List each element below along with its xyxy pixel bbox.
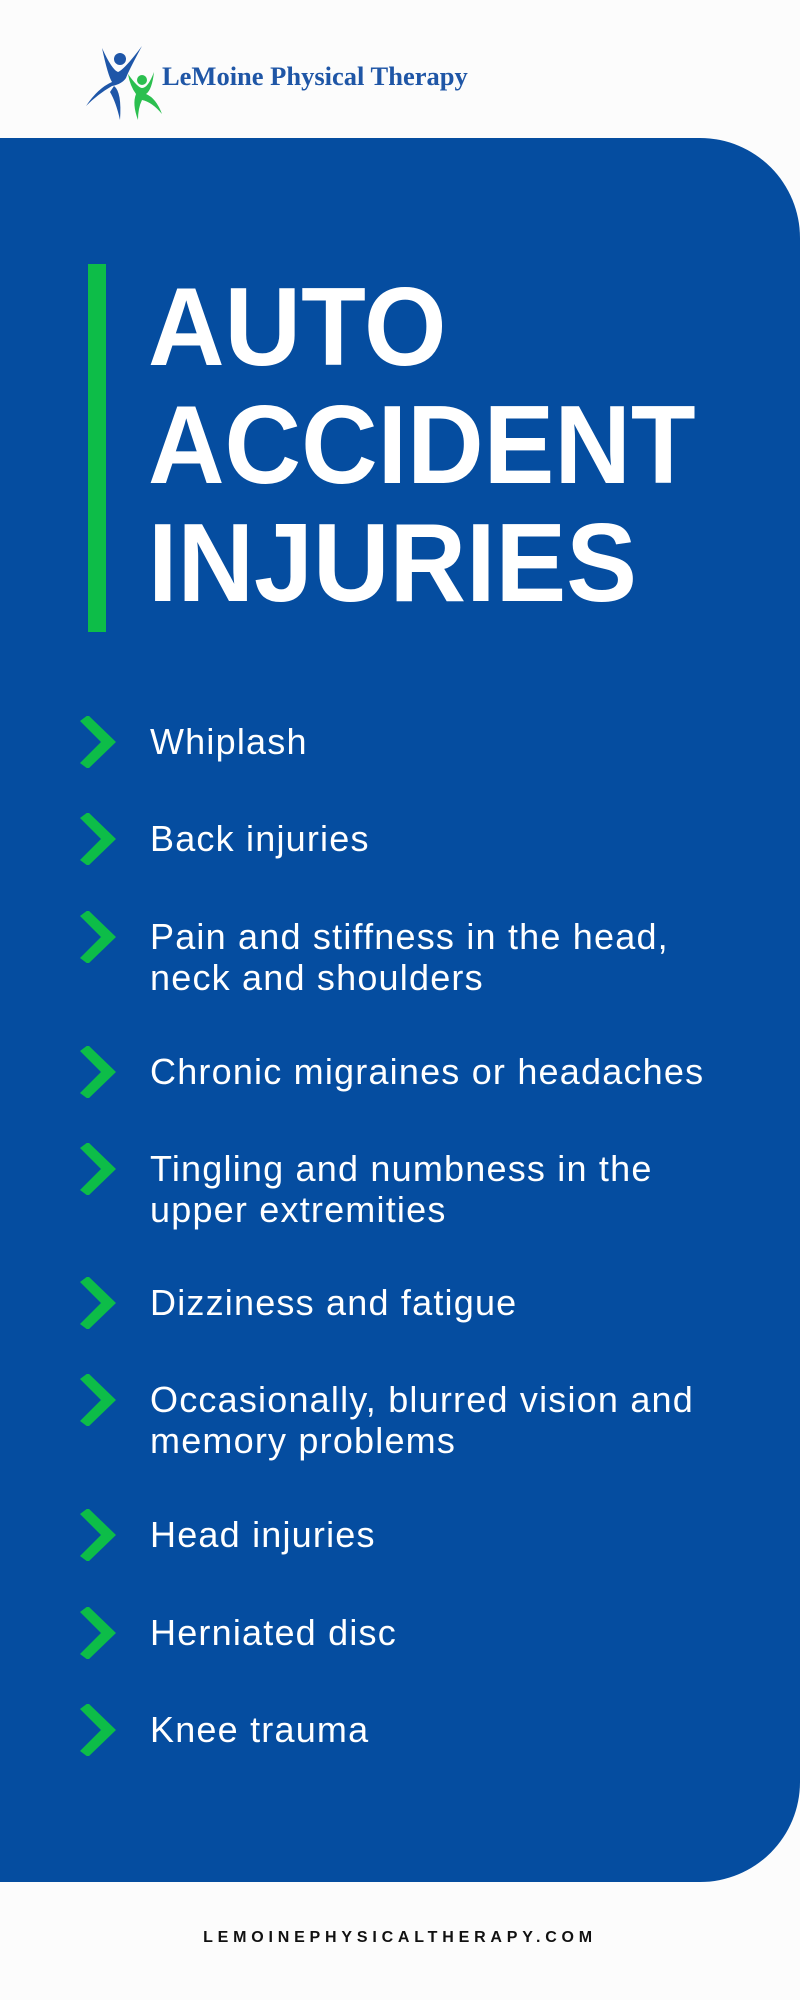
text: upper extremities: [150, 1189, 447, 1230]
list item: Head injuries: Head injuries: [150, 1514, 376, 1555]
title: INJURIES: [148, 501, 637, 625]
list item: Knee trauma: Knee trauma: [150, 1709, 369, 1750]
logo: [86, 46, 468, 120]
accent bar: [88, 264, 106, 632]
list item: Chronic migraines: Chronic migraines or headaches: [150, 1051, 704, 1092]
title: ACCIDENT: [148, 383, 696, 507]
list item: Dizziness: [80, 1277, 517, 1329]
title: AUTO: [148, 265, 446, 389]
list item: Herniated disc: [80, 1607, 397, 1659]
list item: Dizziness: Dizziness and fatigue: [150, 1282, 517, 1323]
title: [148, 265, 696, 625]
list item: Knee trauma: [80, 1704, 369, 1756]
list item: Pain and stiffness: Pain and stiffness in the head,: [150, 916, 669, 957]
icon: figures: [86, 46, 162, 120]
list item: Herniated disc: Herniated disc: [150, 1612, 397, 1653]
list item: Back injuries: [80, 813, 370, 865]
list item: Occasionally: Occasionally, blurred vision and: [150, 1379, 694, 1420]
footer url: LEMOINEPHYSICALTHERAPY.COM: [203, 1929, 597, 1946]
list item: Pain and stiffness: [80, 911, 669, 998]
text: neck and shoulders: [150, 957, 484, 998]
list item: Occasionally: [80, 1374, 694, 1461]
list item: Tingling: Tingling and numbness in the: [150, 1148, 653, 1189]
list item: Back injuries: Back injuries: [150, 818, 370, 859]
list item: Tingling: [80, 1143, 653, 1230]
list item: Head injuries: [80, 1509, 376, 1561]
list item: Whiplash: [80, 716, 308, 768]
logo text: LeMoine Physical Therapy: [162, 61, 468, 91]
text: memory problems: [150, 1420, 456, 1461]
list item: Whiplash: Whiplash: [150, 721, 308, 762]
